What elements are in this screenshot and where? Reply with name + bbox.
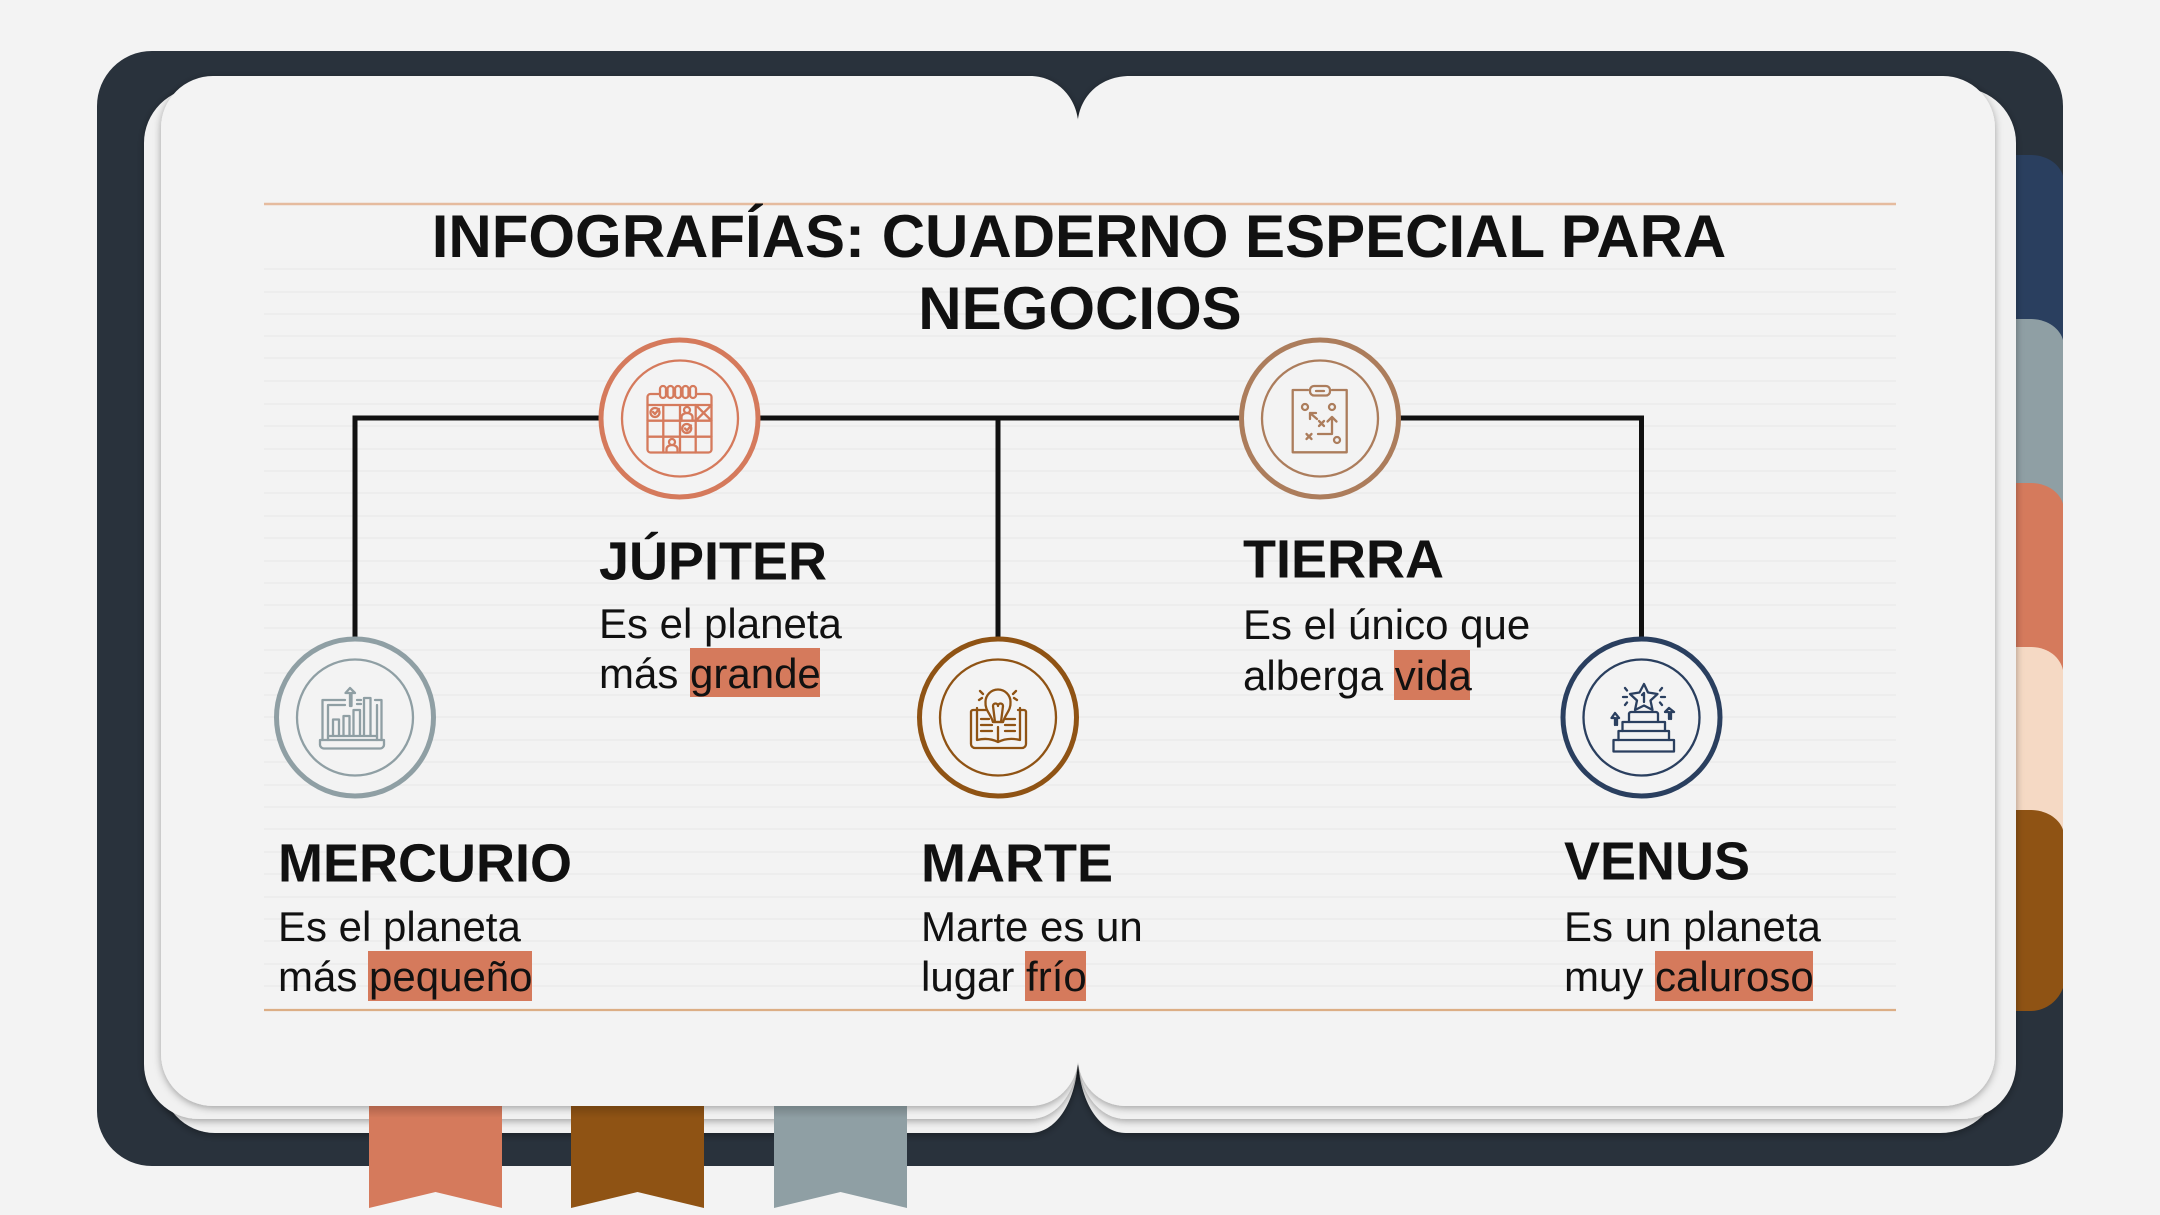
description: Júpiter [599, 600, 842, 697]
side index tabs [2016, 155, 2063, 1011]
node: Venus [1563, 639, 1822, 1001]
description: Marte [921, 903, 1143, 1001]
heading: Mercurio: MERCURIO [278, 834, 572, 894]
back page stack [144, 88, 2016, 1133]
description: Júpiter: más grande [599, 650, 821, 697]
description: Júpiter: Es el planeta [599, 600, 842, 647]
description: Marte: Marte es un [921, 903, 1143, 950]
icon: clipboard strategy in rings [1242, 340, 1398, 497]
heading: Júpiter: JÚPITER [599, 532, 827, 592]
bookmarks [369, 1106, 907, 1208]
description: Mercurio: más pequeño [278, 953, 533, 1000]
description: Mercurio: Es el planeta [278, 903, 521, 950]
icon: calendar in rings [601, 340, 758, 497]
description: Tierra [1243, 601, 1530, 700]
description: Venus: Es un planeta [1564, 903, 1822, 950]
description: Tierra: alberga vida [1243, 652, 1472, 699]
description: Tierra: Es el único que [1243, 601, 1530, 648]
open notebook front pages [161, 76, 1995, 1106]
node: Júpiter [599, 340, 842, 697]
description: Venus [1564, 903, 1822, 1001]
heading: Tierra: TIERRA [1243, 530, 1444, 590]
title [432, 203, 1726, 342]
icon: podium with star in rings [1563, 639, 1720, 796]
node: Mercurio [276, 639, 572, 1001]
node: Marte [920, 639, 1143, 1001]
connector lines [355, 418, 1642, 637]
description: Venus: muy caluroso [1564, 953, 1814, 1000]
description: Mercurio [278, 903, 533, 1001]
title: NEGOCIOS [918, 275, 1242, 342]
icon: laptop chart in rings [276, 639, 434, 796]
description: Marte: lugar frío [921, 953, 1087, 1000]
node: Tierra [1242, 340, 1530, 700]
heading: Marte: MARTE [921, 834, 1113, 894]
heading: Venus: VENUS [1564, 832, 1750, 892]
title: INFOGRAFÍAS: CUADERNO ESPECIAL PARA [432, 203, 1726, 270]
icon: book with light bulb in rings [920, 639, 1076, 796]
